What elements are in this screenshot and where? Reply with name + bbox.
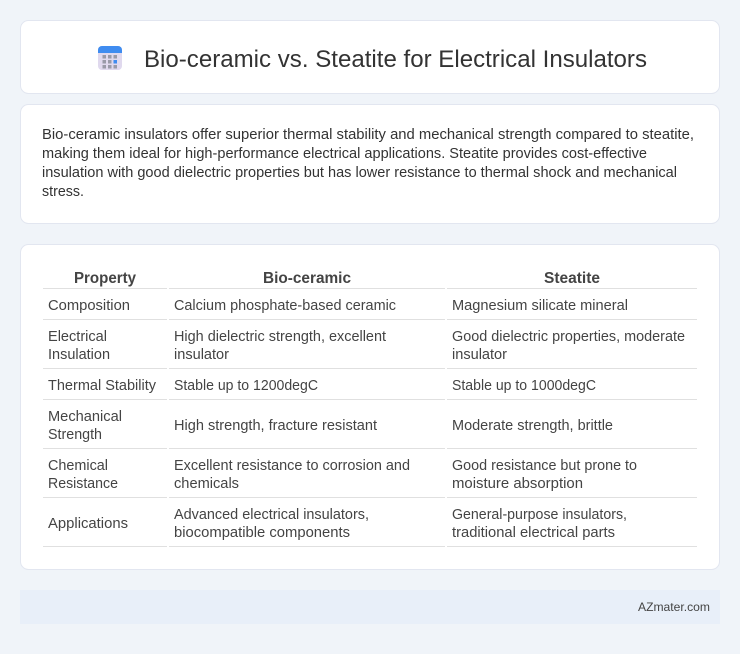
text block: description [42, 127, 694, 200]
table header: Bio-ceramic [263, 270, 351, 287]
row: applications: biocompatible components [174, 525, 350, 541]
footer text: AZmater.com [638, 600, 710, 614]
text block: description: Bio-ceramic insulators offer superior thermal stability and mechanical strength compared to steatite, [42, 127, 694, 143]
row: electrical insulation: High dielectric strength, excellent [174, 329, 386, 345]
row: chemical resistance [48, 458, 637, 492]
row: applications [48, 507, 627, 541]
table header: Steatite [544, 270, 600, 287]
row: thermal stability: Thermal Stability [48, 378, 157, 394]
row: chemical resistance: Resistance [48, 476, 118, 492]
row: chemical resistance: Good resistance but prone to [452, 458, 637, 474]
row: electrical insulation: insulator [174, 347, 229, 363]
row: chemical resistance: chemicals [174, 476, 239, 492]
row: applications: General-purpose insulators, [452, 507, 627, 523]
row: electrical insulation [48, 329, 685, 363]
table header: Property [74, 270, 136, 287]
row: composition: Composition [48, 298, 130, 314]
row: composition: Magnesium silicate mineral [452, 298, 628, 314]
row: chemical resistance: Excellent resistance to corrosion and [174, 458, 410, 474]
panel: description [20, 104, 720, 224]
row: thermal stability: Stable up to 1000degC [452, 378, 596, 394]
text block: description: insulation with good dielectric properties but has lower resistance to thermal shock and mechanical [42, 165, 677, 181]
row: thermal stability: Stable up to 1200degC [174, 378, 318, 394]
row: electrical insulation: Insulation [48, 347, 110, 363]
row: mechanical strength [48, 409, 613, 443]
panel: comparison table [20, 244, 720, 570]
row: mechanical strength: High strength, fracture resistant [174, 418, 377, 434]
row: applications: Advanced electrical insulators, [174, 507, 369, 523]
row: mechanical strength: Strength [48, 427, 102, 443]
row: electrical insulation: Good dielectric properties, moderate [452, 329, 685, 345]
table header [74, 270, 600, 287]
row: electrical insulation: insulator [452, 347, 507, 363]
title: Bio-ceramic vs. Steatite for Electrical Insulators [144, 46, 647, 73]
row: composition: Calcium phosphate-based ceramic [174, 298, 396, 314]
row: electrical insulation: Electrical [48, 329, 107, 345]
row: thermal stability [48, 378, 596, 394]
row: applications: traditional electrical parts [452, 525, 615, 541]
footer bar [20, 590, 720, 624]
text block: description: stress. [42, 184, 84, 200]
text block: description: making them ideal for high-performance electrical applications. Steatite provides cost-effective [42, 146, 647, 162]
row: mechanical strength: Mechanical [48, 409, 122, 425]
row: applications: Applications [48, 516, 128, 532]
row: mechanical strength: Moderate strength, brittle [452, 418, 613, 434]
panel: title card [20, 20, 720, 94]
row: composition [48, 298, 628, 314]
icon: calendar [98, 46, 122, 70]
row: chemical resistance: Chemical [48, 458, 108, 474]
row: chemical resistance: moisture absorption [452, 476, 583, 492]
